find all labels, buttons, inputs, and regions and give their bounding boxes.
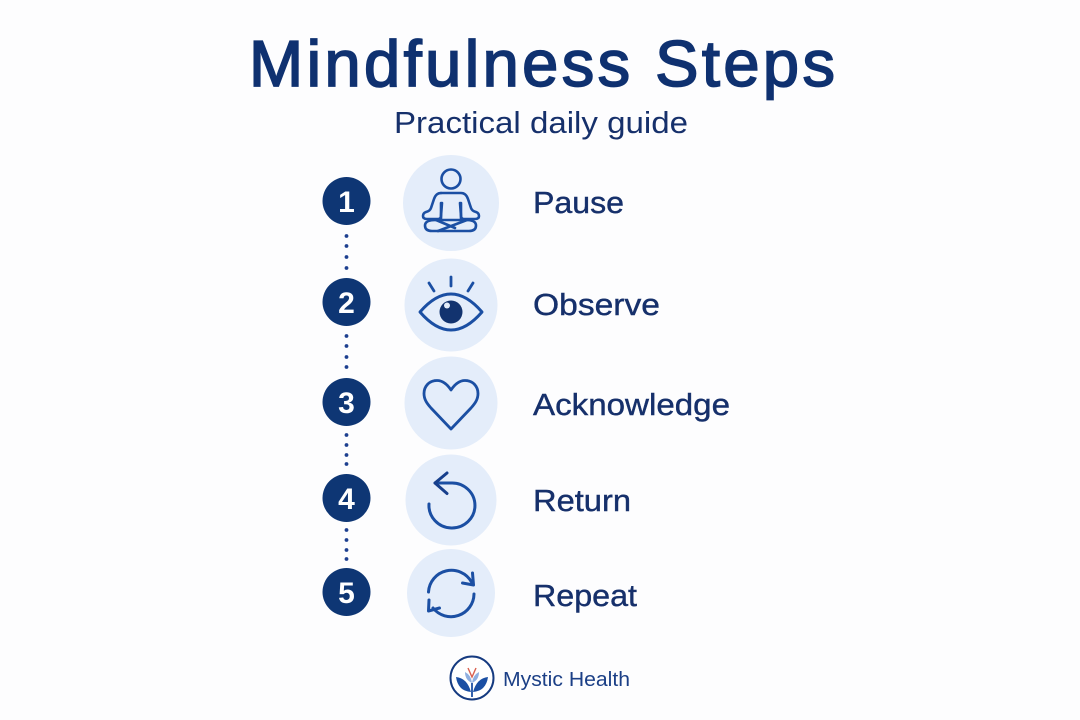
number badge 3: 3 [338,387,355,420]
brand logo [450,656,630,700]
icon: return arrow [429,473,475,528]
subtitle: Practical daily guide [394,105,688,140]
label: Acknowledge: Acknowledge [533,387,730,422]
number badge 5 [322,568,370,616]
icon circle 1 [403,155,499,251]
number badge 5: 5 [338,577,355,610]
icon circle 2 [404,258,498,352]
icon: heart [424,380,478,429]
label: Pause: Pause [533,185,624,220]
label: Repeat: Repeat [533,578,637,613]
step 5: repeat [322,549,637,637]
icon: eye [420,277,482,330]
label: Return: Return [533,483,631,518]
icon circle 3 [404,356,498,450]
connector dots 1-2 [345,234,348,270]
number badge 3 [322,378,370,426]
number badge 4 [322,474,370,522]
connector dots 4-5 [345,528,348,561]
connector dots 3-4 [345,433,348,466]
brand name: Mystic Health [503,669,630,691]
logo ring [450,656,494,700]
label: Observe: Observe [533,287,660,322]
icon circle 4 [406,454,496,546]
number badge 4: 4 [338,483,355,516]
logo lotus [456,668,488,697]
number badge 1 [322,177,370,225]
number badge 2 [322,278,370,326]
number badge 1: 1 [338,186,355,219]
title: Mindfulness Steps [249,27,835,100]
step 2: observe [322,258,660,352]
connector dots 2-3 [345,334,348,369]
icon circle 5 [407,549,495,637]
step 4: return [322,454,631,546]
icon: repeat arrows [428,570,474,617]
icon: meditating person [423,170,479,231]
number badge 2: 2 [338,287,355,320]
step 3: acknowledge [322,356,730,450]
step 1: pause [322,155,624,251]
